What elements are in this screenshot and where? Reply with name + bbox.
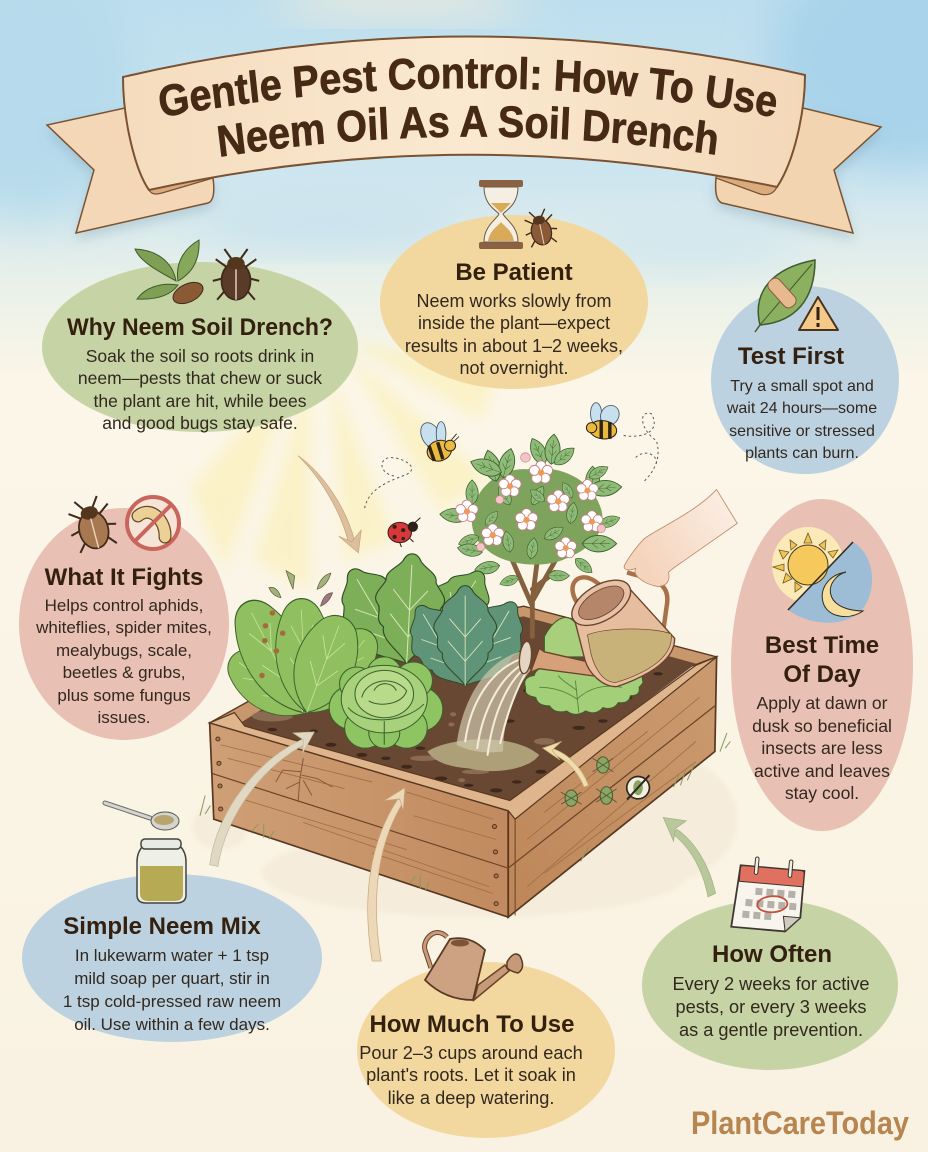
icon: leaves and seed — [135, 240, 206, 308]
body text: issues. — [98, 708, 150, 727]
banner main ribbon — [123, 36, 805, 190]
bubble — [380, 215, 648, 389]
heading: How Often — [712, 941, 832, 968]
body text: plants can burn. — [745, 445, 859, 462]
arrow from how often — [663, 817, 716, 897]
aphids on wood — [561, 757, 617, 806]
bubble — [22, 874, 322, 1042]
roots sketch — [276, 758, 333, 802]
heading: What It Fights — [45, 564, 203, 591]
can opening — [573, 579, 629, 626]
body text: not overnight. — [459, 358, 569, 378]
icon: oil jar — [137, 839, 186, 903]
bubble — [42, 262, 358, 432]
blue-green kale — [394, 586, 540, 700]
hand — [624, 490, 737, 587]
panel: how often — [642, 857, 898, 1070]
blossoms — [456, 461, 603, 558]
title line 1: Gentle Pest Control: How To Use — [160, 56, 776, 116]
arrow from neem mix — [210, 732, 314, 866]
body text: and good bugs stay safe. — [102, 413, 298, 433]
body text: inside the plant—expect — [418, 313, 610, 333]
icon: sun and moon — [772, 527, 872, 623]
bee one — [417, 420, 459, 464]
body text: 1 tsp cold-pressed raw neem — [63, 992, 281, 1011]
icon: calendar — [731, 857, 805, 933]
butterhead lettuce — [329, 657, 443, 748]
heading: Why Neem Soil Drench? — [67, 314, 333, 341]
panel: how much to use — [357, 933, 615, 1138]
body text: sensitive or stressed — [729, 423, 875, 440]
body text: mild soap per quart, stir in — [74, 969, 270, 988]
ladybug — [388, 518, 420, 547]
arrow from how much — [368, 788, 405, 961]
body text: In lukewarm water + 1 tsp — [75, 946, 269, 965]
bubble — [711, 286, 899, 474]
body text: Every 2 weeks for active — [672, 974, 870, 994]
body text: insects are less — [761, 738, 883, 758]
bed screws — [216, 737, 498, 906]
flowering tree — [439, 434, 622, 637]
bee two — [586, 402, 623, 441]
icon: beetle — [63, 493, 121, 554]
body text: Helps control aphids, — [45, 596, 203, 615]
wet soil puddle — [427, 739, 539, 771]
arrow to bed top — [298, 456, 361, 553]
body text: plant's roots. Let it soak in — [366, 1065, 576, 1085]
trunk — [512, 545, 558, 637]
no bug symbol — [627, 775, 649, 800]
heading: Best Time — [765, 632, 879, 659]
bed top rims — [210, 657, 717, 819]
bubble — [731, 499, 913, 831]
title banner — [46, 36, 882, 274]
title line 2: Neem Oil As A Soil Drench — [218, 106, 717, 157]
body text: beetles & grubs, — [63, 663, 185, 682]
soil — [238, 616, 696, 806]
banner right fold — [716, 150, 777, 195]
garden illustration — [193, 402, 737, 961]
body text: active and leaves — [754, 761, 890, 781]
body text: dusk so beneficial — [752, 716, 892, 736]
bed right face — [508, 657, 717, 917]
icon: spoon — [105, 803, 179, 830]
can water — [587, 629, 671, 682]
banner left tail — [47, 108, 214, 233]
arrow to pests — [543, 741, 588, 787]
icon: beetle — [213, 249, 259, 300]
pink buds — [477, 453, 605, 551]
body text: Apply at dawn or — [756, 693, 888, 713]
panel: best time of day — [731, 499, 913, 831]
body text: plus some fungus — [57, 686, 191, 705]
body text: Soak the soil so roots drink in — [86, 346, 314, 366]
can rim — [564, 571, 638, 635]
panel: be patient — [380, 180, 648, 389]
banner right tail — [716, 108, 881, 233]
damaged plant bits — [269, 571, 333, 606]
body text: Try a small spot and — [730, 378, 874, 395]
body text: like a deep watering. — [388, 1088, 554, 1108]
leaf damage spots — [259, 610, 285, 678]
soil light patches — [252, 711, 555, 782]
can rear handle — [573, 572, 667, 643]
grass tufts — [200, 733, 730, 890]
icon: warning triangle — [799, 297, 838, 330]
body text: wait 24 hours—some — [726, 400, 877, 417]
body text: as a gentle prevention. — [679, 1020, 863, 1040]
water pouring — [457, 652, 531, 755]
body text: the plant are hit, while bees — [93, 391, 307, 411]
icon: hourglass — [479, 180, 523, 249]
bed back rim — [210, 606, 717, 726]
panel: simple neem mix — [22, 803, 322, 1042]
panel: test first — [711, 260, 899, 474]
spinach plant — [216, 589, 391, 733]
bee trails — [365, 413, 658, 508]
icon: watering can — [425, 933, 523, 1000]
panel: what it fights — [19, 493, 229, 740]
icon: small beetle — [521, 207, 560, 248]
sun rays — [190, 340, 500, 590]
brand wordmark: PlantCareToday — [691, 1105, 909, 1141]
leaves — [439, 434, 622, 589]
icon: no grubs — [127, 497, 179, 549]
bubble — [19, 508, 229, 740]
panel: why neem soil drench — [42, 240, 358, 433]
body text: mealybugs, scale, — [56, 641, 192, 660]
body text: Pour 2–3 cups around each — [359, 1043, 583, 1063]
heading: Of Day — [783, 661, 861, 688]
heading: How Much To Use — [370, 1011, 574, 1038]
body text: whiteflies, spider mites, — [35, 618, 212, 637]
back leafy greens — [322, 552, 508, 680]
wood plank lines — [212, 697, 715, 915]
bed left front face — [210, 723, 508, 917]
heading: Simple Neem Mix — [63, 913, 261, 940]
body text: pests, or every 3 weeks — [675, 997, 867, 1017]
heading: Be Patient — [455, 259, 573, 286]
can spout — [531, 648, 603, 677]
watering can — [518, 571, 675, 687]
ground wash — [193, 755, 737, 917]
banner left fold — [149, 150, 213, 194]
bubble — [642, 900, 898, 1070]
body text: Neem works slowly from — [416, 291, 612, 311]
icon: leaf with bandage — [755, 260, 815, 332]
soil specks — [268, 672, 663, 792]
can rose head — [518, 641, 533, 674]
body text: stay cool. — [785, 783, 859, 803]
can body — [574, 586, 675, 687]
body text: oil. Use within a few days. — [74, 1015, 270, 1034]
foliage mass — [472, 468, 603, 565]
body text: results in about 1–2 weeks, — [405, 336, 623, 356]
right lettuce — [525, 662, 643, 714]
back lettuce — [544, 617, 587, 657]
heading: Test First — [738, 343, 844, 370]
body text: neem—pests that chew or suck — [78, 368, 322, 388]
bubble — [357, 962, 615, 1138]
